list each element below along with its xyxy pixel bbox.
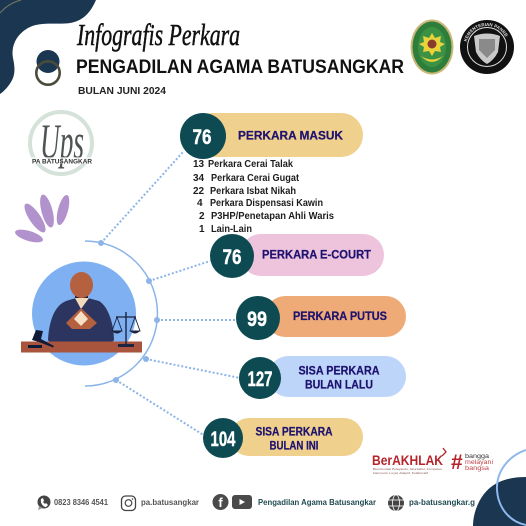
pill: Sisa Perkara Bulan Lalu: BULAN LALU bbox=[305, 378, 373, 392]
logo: Ups PA Batusangkar: Ups bbox=[40, 113, 84, 169]
logo: bangga melayani bangsa: melayani bbox=[465, 459, 493, 466]
connector arc with dots bbox=[85, 152, 240, 436]
case breakdown list: 34 bbox=[193, 173, 205, 184]
logo: zona integritas badge bbox=[460, 20, 514, 74]
logo: BerAKHLAK: Berorientasi Pelayanan, Akuntabel, Kompeten, bbox=[373, 467, 443, 471]
bottom-right navy blob with ring bbox=[473, 450, 526, 526]
logo: bangga melayani bangsa bbox=[451, 451, 493, 474]
footer: instagram bbox=[122, 496, 199, 510]
pill: Sisa Perkara Bulan Ini: SISA PERKARA bbox=[256, 424, 333, 438]
pill: Perkara E-Court bbox=[210, 234, 384, 278]
case breakdown list: 22 bbox=[193, 186, 205, 197]
pill: Perkara Masuk: 76 bbox=[192, 126, 212, 149]
title: PENGADILAN AGAMA BATUSANGKAR bbox=[76, 56, 404, 78]
title: BULAN JUNI 2024 bbox=[78, 85, 166, 97]
footer: website bbox=[388, 495, 475, 511]
pill: Perkara Putus: 99 bbox=[247, 308, 267, 331]
pill: Perkara E-Court: 76 bbox=[222, 246, 242, 269]
case breakdown list: Perkara Cerai Talak bbox=[208, 159, 293, 170]
pill: Sisa Perkara Bulan Ini: 104 bbox=[210, 428, 236, 451]
judge illustration bbox=[21, 262, 142, 366]
logo: Ups PA Batusangkar bbox=[30, 112, 93, 174]
footer: facebook and youtube: Pengadilan Agama Batusangkar bbox=[258, 498, 376, 507]
pill: Sisa Perkara Bulan Ini bbox=[203, 418, 363, 458]
pill: Perkara Masuk: PERKARA MASUK bbox=[238, 128, 343, 142]
logo: bangga melayani bangsa: bangga bbox=[465, 453, 489, 460]
case breakdown list: P3HP/Penetapan Ahli Waris bbox=[211, 211, 334, 222]
title bbox=[76, 17, 404, 97]
case breakdown list: 1 bbox=[199, 224, 205, 235]
case breakdown list: 4 bbox=[197, 198, 203, 209]
decorative circle and ring bbox=[36, 50, 60, 85]
case breakdown list: Perkara Dispensasi Kawin bbox=[210, 198, 323, 209]
logo: bangga melayani bangsa: bangsa bbox=[465, 465, 489, 472]
logo: BerAKHLAK: Harmonis, Loyal, Adaptif, Kolaboratif bbox=[373, 471, 428, 475]
title: Infografis Perkara bbox=[76, 17, 240, 52]
pill: Perkara Putus bbox=[236, 296, 406, 340]
logo: BerAKHLAK: BerAKHLAK bbox=[372, 452, 443, 468]
logo: bangga melayani bangsa: # bbox=[451, 451, 463, 474]
pill: Perkara E-Court: PERKARA E-COURT bbox=[262, 248, 372, 262]
footer: facebook and youtube bbox=[212, 494, 376, 510]
footer: facebook and youtube: f bbox=[218, 495, 223, 510]
case breakdown list: Lain-Lain bbox=[211, 224, 252, 235]
footer: phone: 0823 8346 4541 bbox=[54, 498, 109, 507]
logo: Ups PA Batusangkar: PA BATUSANGKAR bbox=[32, 160, 93, 166]
logo: zona integritas badge: KEMENTERIAN PANRB bbox=[464, 23, 508, 42]
footer: website: pa-batusangkar.g bbox=[409, 498, 475, 507]
pill: Perkara Masuk bbox=[180, 113, 363, 159]
footer: phone bbox=[38, 496, 109, 510]
pill: Sisa Perkara Bulan Lalu bbox=[239, 356, 406, 399]
logo: green court emblem bbox=[410, 20, 454, 74]
case breakdown list: Perkara Isbat Nikah bbox=[210, 186, 296, 197]
pill: Sisa Perkara Bulan Lalu: SISA PERKARA bbox=[298, 364, 380, 378]
case breakdown list: 2 bbox=[199, 211, 205, 222]
pill: Sisa Perkara Bulan Ini: BULAN INI bbox=[270, 438, 318, 452]
pill: Perkara Putus: PERKARA PUTUS bbox=[293, 309, 387, 323]
case breakdown list: 13 bbox=[193, 159, 205, 170]
logo: BerAKHLAK bbox=[372, 448, 446, 475]
case breakdown list bbox=[193, 159, 334, 235]
top-left navy blob bbox=[0, 0, 96, 94]
purple petals bbox=[14, 193, 72, 245]
case breakdown list: Perkara Cerai Gugat bbox=[211, 173, 300, 184]
pill: Sisa Perkara Bulan Lalu: 127 bbox=[248, 368, 272, 391]
footer: instagram: pa.batusangkar bbox=[141, 498, 199, 507]
